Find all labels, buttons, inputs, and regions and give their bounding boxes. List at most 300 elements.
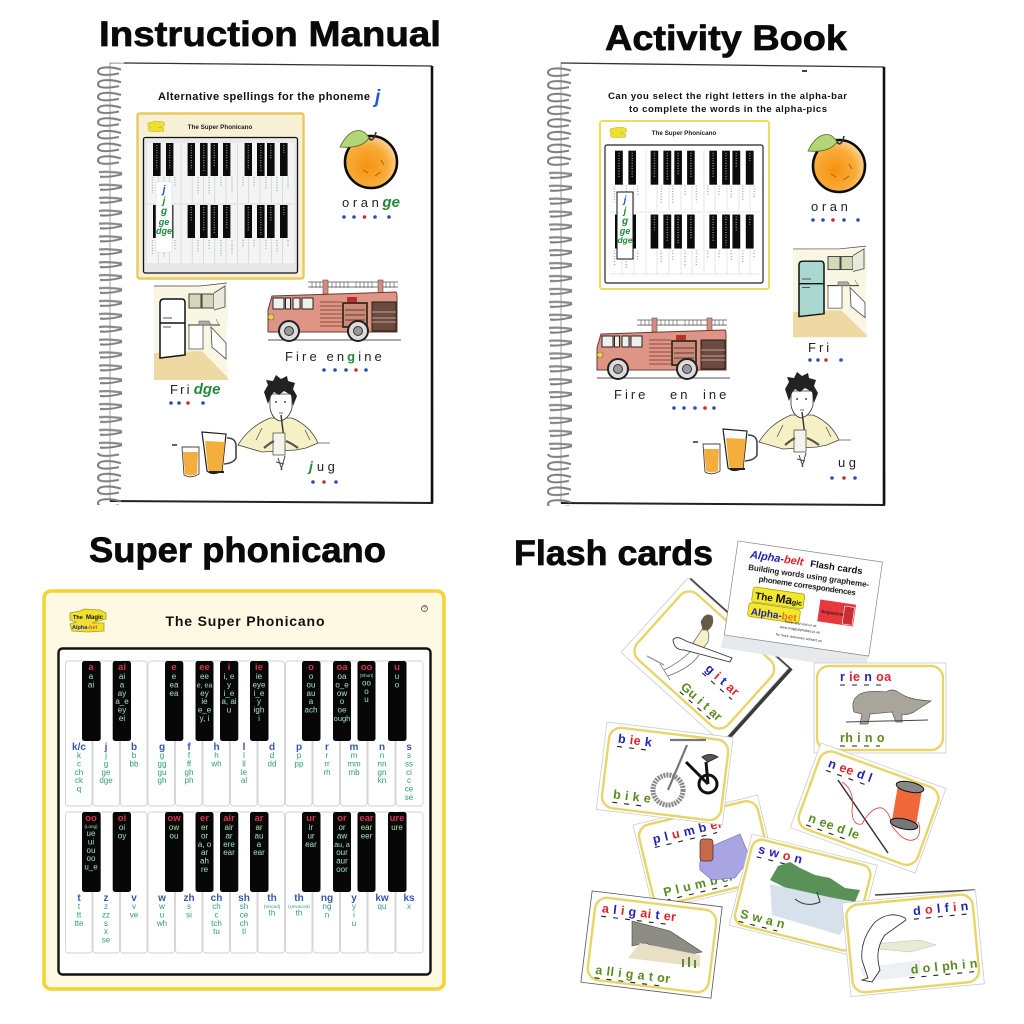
word: oran: oran bbox=[811, 199, 851, 214]
card: rhino: rh i n o bbox=[840, 731, 885, 745]
vowel spellings: upper row: igh bbox=[254, 706, 264, 715]
consonant spellings: upper row: k bbox=[77, 751, 82, 760]
vowel spellings: lower row: air bbox=[225, 823, 234, 832]
consonant spellings: upper row: c bbox=[407, 776, 411, 785]
consonant spellings: lower row: v bbox=[132, 902, 136, 911]
mini super phonicano bbox=[600, 121, 769, 289]
mini title: The Super Phonicano bbox=[188, 124, 253, 131]
consonant spellings: upper row: dd bbox=[268, 759, 276, 768]
vowel spellings: lower row: oi bbox=[119, 823, 125, 832]
consonant spellings: lower row: c bbox=[214, 910, 218, 919]
vowel spellings: upper row: ai bbox=[88, 680, 94, 689]
flash cards box bbox=[720, 541, 882, 671]
consonant spellings: upper row: n bbox=[379, 742, 385, 753]
consonant spellings: lower row: th bbox=[269, 908, 275, 918]
word: fire engine: Fire engine bbox=[285, 349, 385, 364]
vowel spellings: lower row: ar bbox=[225, 831, 233, 840]
consonant spellings: upper row: ch bbox=[75, 768, 83, 777]
icon: jug and glass bbox=[182, 432, 236, 477]
consonant spellings: upper row: ff bbox=[187, 759, 192, 768]
consonant spellings: upper row: ph bbox=[185, 776, 193, 785]
vowel spellings: lower row: ure bbox=[390, 813, 404, 824]
vowel spellings: lower row: ui bbox=[88, 837, 94, 846]
instruction text: Can you select the right letters in the alpha-bar bbox=[608, 91, 847, 102]
consonant spellings: lower row: si bbox=[186, 910, 192, 919]
j spellings popup: ge bbox=[158, 217, 169, 227]
icon: kitchen with fridge bbox=[154, 283, 228, 380]
sound dots: fridge bbox=[169, 401, 205, 405]
card: swan bbox=[729, 834, 877, 956]
vowel spellings: upper row bbox=[88, 662, 400, 723]
consonant spellings: upper row: al bbox=[241, 776, 247, 785]
vowel spellings: lower row: a, o bbox=[198, 840, 212, 849]
vowel spellings: upper row: ou bbox=[307, 680, 315, 689]
vowel spellings: lower row: ear bbox=[359, 813, 374, 824]
black keyboard border bbox=[58, 648, 430, 974]
card: swan: s w o n bbox=[757, 842, 804, 867]
card: guitar bbox=[621, 577, 793, 745]
white keys bbox=[66, 661, 423, 953]
consonant spellings: upper row: l bbox=[243, 742, 246, 753]
vowel spellings: upper row: e_e bbox=[198, 706, 212, 715]
card: needle bbox=[790, 743, 946, 873]
consonant spellings: lower row: z bbox=[104, 893, 108, 904]
mini logo bbox=[610, 127, 627, 138]
consonant spellings: lower row: zh bbox=[183, 893, 195, 904]
consonant spellings: lower row: tu bbox=[213, 927, 220, 936]
card: dolphin bbox=[842, 890, 984, 997]
spiral binding bbox=[95, 66, 125, 505]
card: needle: n ee d le bbox=[806, 811, 862, 842]
close icon: ? bbox=[423, 606, 426, 612]
vowel spellings: upper row: ea bbox=[170, 689, 179, 698]
vowel spellings: lower row: ear bbox=[361, 823, 373, 832]
consonant spellings: upper row: r bbox=[325, 742, 329, 753]
consonant spellings: upper row: wh bbox=[210, 759, 222, 768]
consonant spellings: lower row: tt bbox=[77, 910, 82, 919]
consonant spellings: lower row: ch bbox=[240, 919, 248, 928]
vowel spellings: upper row: e, ea bbox=[197, 682, 212, 689]
vowel spellings: lower row: ar bbox=[255, 813, 264, 824]
consonant spellings: upper row: gu bbox=[158, 768, 166, 777]
book page bbox=[561, 63, 885, 505]
phoneme j: j bbox=[372, 87, 381, 108]
flash cards box: phoneme correspondences bbox=[758, 574, 857, 598]
vowel spellings: lower row: a bbox=[257, 840, 262, 849]
vowel spellings: upper row: i_e bbox=[224, 689, 235, 698]
vowel spellings: upper row: a bbox=[309, 697, 314, 706]
sound dots: orange bbox=[811, 218, 860, 222]
consonant spellings: lower row: sh bbox=[238, 893, 250, 904]
consonant spellings: lower row: ks bbox=[403, 893, 415, 904]
vowel spellings: lower row: ear bbox=[253, 848, 265, 857]
icon: orange bbox=[340, 131, 397, 188]
j spellings box: g bbox=[621, 216, 628, 227]
card: rhino: r ie n oa bbox=[840, 670, 892, 684]
vowel spellings: upper row: a bbox=[88, 662, 94, 673]
consonant spellings: lower row: u bbox=[160, 910, 164, 919]
vowel spellings: upper row: ai bbox=[119, 672, 125, 681]
icon: boy drinking juice bbox=[693, 372, 851, 467]
vowel spellings: upper row: a bbox=[89, 672, 94, 681]
contact text: Tower and visit us at: bbox=[784, 620, 817, 628]
consonant spellings: upper row: b bbox=[131, 742, 137, 753]
mini keyboard bbox=[605, 145, 763, 283]
consonant spellings: upper row: f bbox=[188, 751, 191, 760]
consonant spellings: lower row: t bbox=[77, 893, 81, 904]
consonant spellings: upper row: bb bbox=[130, 759, 139, 768]
vowel spellings: lower row: oo bbox=[85, 813, 97, 824]
consonant spellings: upper row: mb bbox=[348, 768, 360, 777]
vowel spellings: lower row: ou bbox=[87, 846, 95, 855]
vowel spellings: lower row: ou bbox=[170, 831, 178, 840]
word: fire engine with gap: ine bbox=[703, 387, 729, 402]
vowel spellings: lower row: oi bbox=[118, 813, 126, 824]
consonant spellings: lower row: ve bbox=[130, 910, 139, 919]
vowel spellings: upper row: eye bbox=[253, 680, 266, 689]
vowel spellings: upper row: o bbox=[309, 672, 314, 681]
panel: flash cards collection bbox=[581, 541, 984, 998]
consonant spellings: lower row: n bbox=[325, 910, 329, 919]
vowel spellings: lower row: ue bbox=[87, 829, 96, 838]
card: swan: S w a n bbox=[739, 907, 787, 931]
consonant spellings: upper row: p bbox=[296, 742, 302, 753]
vowel spellings: upper row: y bbox=[257, 697, 261, 706]
vowel spellings: upper row: i bbox=[258, 714, 260, 723]
j spellings box: dge bbox=[617, 235, 633, 245]
icon: jug and glass bbox=[703, 429, 757, 474]
consonant spellings: lower row: w bbox=[158, 902, 165, 911]
consonant spellings: lower row: (Voiced) bbox=[264, 904, 281, 909]
vowel spellings: upper row: o bbox=[364, 687, 369, 696]
consonant spellings: upper row: j bbox=[104, 742, 108, 753]
sound dots: jug bbox=[830, 476, 857, 480]
icon: fire engine bbox=[268, 280, 401, 341]
vowel spellings: upper row: u bbox=[395, 672, 399, 681]
panel: instruction manual spiral book bbox=[95, 63, 433, 505]
j spellings box: ge bbox=[619, 226, 630, 236]
magic alpha-bet logo bbox=[747, 586, 805, 625]
vowel spellings: upper row: a_e bbox=[115, 697, 129, 706]
box subtitle: Building words using grapheme- bbox=[748, 563, 870, 589]
consonant spellings: lower row: y bbox=[351, 893, 357, 904]
consonant spellings: upper row: le bbox=[241, 768, 248, 777]
vowel spellings: lower row: re bbox=[201, 865, 209, 874]
vowel spellings: upper row: o_e bbox=[335, 680, 349, 689]
vowel spellings: lower row: ear bbox=[223, 848, 235, 857]
card: guitar: g i t ar bbox=[703, 661, 742, 699]
vowel spellings: upper row: a, ai bbox=[221, 697, 237, 706]
vowel spellings: lower row: or bbox=[201, 831, 208, 840]
black keys bbox=[82, 661, 406, 892]
heading: Activity Book: Activity Book bbox=[605, 19, 848, 58]
icon: orange bbox=[808, 135, 865, 192]
vowel spellings: lower row: er bbox=[200, 813, 209, 824]
word: fire engine with gap: Fire bbox=[614, 387, 648, 402]
logo: Alpha-bet bbox=[72, 625, 98, 631]
consonant spellings: upper row: kn bbox=[378, 776, 386, 785]
consonant spellings: lower row: th bbox=[267, 893, 277, 904]
vowel spellings: lower row: ur bbox=[306, 813, 316, 824]
word: fire engine with gap: en bbox=[670, 387, 690, 402]
consonant spellings: upper row: s bbox=[407, 751, 411, 760]
consonant spellings: lower row: u bbox=[352, 919, 356, 928]
consonant spellings: upper row bbox=[72, 742, 414, 802]
consonant spellings: upper row: ci bbox=[406, 768, 412, 777]
consonant spellings: upper row: p bbox=[297, 751, 302, 760]
yellow frame bbox=[44, 591, 444, 989]
vowel spellings: lower row: ow bbox=[169, 823, 179, 832]
mini title: The Super Phonicano bbox=[652, 130, 717, 137]
mini keyboard bbox=[144, 138, 298, 273]
consonant spellings: upper row: d bbox=[270, 751, 274, 760]
red phoneme box bbox=[817, 600, 856, 626]
consonant spellings: lower row: x bbox=[104, 927, 108, 936]
book page bbox=[110, 63, 433, 503]
sound dots: jug bbox=[311, 480, 338, 484]
card: dolphin: d o l ph i n bbox=[910, 956, 978, 977]
vowel spellings: upper row: i, e bbox=[224, 672, 235, 681]
consonant spellings: lower row: t bbox=[78, 902, 81, 911]
word: ug: ug bbox=[838, 455, 859, 470]
mini logo bbox=[148, 121, 165, 132]
consonant spellings: lower row: w bbox=[157, 893, 166, 904]
vowel spellings: upper row: (Short) bbox=[360, 673, 374, 678]
consonant spellings: lower row: ch bbox=[211, 893, 222, 904]
consonant spellings: lower row: wh bbox=[156, 919, 167, 928]
vowel spellings: upper row: au bbox=[307, 689, 315, 698]
word: fire engine with gap bbox=[614, 387, 729, 402]
consonant spellings: upper row: ce bbox=[405, 785, 414, 794]
j spellings box: j bbox=[622, 195, 627, 206]
consonant spellings: lower row: ce bbox=[240, 910, 249, 919]
consonant spellings: upper row: c bbox=[77, 759, 81, 768]
consonant spellings: upper row: m bbox=[351, 751, 358, 760]
consonant spellings: upper row: r bbox=[326, 751, 329, 760]
vowel spellings: lower row: aw bbox=[337, 831, 347, 840]
logo: Magic bbox=[86, 615, 104, 621]
sound dots: fire engine bbox=[672, 406, 716, 410]
instruction text bbox=[608, 91, 847, 115]
heading: Super phonicano: Super phonicano bbox=[89, 531, 386, 570]
contact text bbox=[775, 619, 824, 643]
heading: Instruction Manual: Instruction Manual bbox=[99, 15, 441, 54]
vowel spellings: upper row: u bbox=[394, 662, 400, 673]
consonant spellings: upper row: b bbox=[132, 751, 137, 760]
contact text: for more resources contact us bbox=[775, 632, 822, 643]
vowel spellings: upper row: ee bbox=[200, 672, 209, 681]
consonant spellings: lower row: ng bbox=[323, 902, 331, 911]
consonant spellings: lower row: s bbox=[187, 902, 191, 911]
vowel spellings: lower row: oor bbox=[336, 865, 348, 874]
vowel spellings: lower row: ur bbox=[307, 831, 315, 840]
panel: activity book spiral book bbox=[545, 63, 885, 506]
sound dots: fridge bbox=[808, 358, 843, 362]
logo: The bbox=[73, 615, 83, 621]
consonant spellings: upper row: dge bbox=[99, 776, 113, 785]
consonant spellings: upper row: k/c bbox=[72, 742, 86, 753]
consonant spellings: upper row: nn bbox=[378, 759, 386, 768]
vowel spellings: upper row: i_e bbox=[254, 689, 265, 698]
vowel spellings: upper row: oo bbox=[362, 678, 371, 687]
vowel spellings: upper row: ie bbox=[255, 662, 263, 673]
card: guitar: Gu i t ar bbox=[678, 680, 725, 724]
consonant spellings: lower row: zz bbox=[102, 910, 110, 919]
card: bike bbox=[596, 722, 733, 825]
consonant spellings: lower row: s bbox=[104, 919, 108, 928]
magic alpha-bet logo: Alpha-bet bbox=[750, 607, 798, 624]
contact text: www.magicalphabet.co.uk bbox=[780, 625, 820, 635]
vowel spellings: upper row: ey bbox=[200, 689, 209, 698]
consonant spellings: upper row: rr bbox=[324, 759, 330, 768]
consonant spellings: upper row: rh bbox=[323, 768, 331, 777]
consonant spellings: upper row: pp bbox=[295, 759, 304, 768]
consonant spellings: upper row: m bbox=[350, 742, 359, 753]
vowel spellings: lower row: ah bbox=[200, 857, 209, 866]
vowel spellings: upper row: ai bbox=[118, 662, 126, 673]
j spellings box bbox=[617, 192, 633, 259]
vowel spellings: lower row: eer bbox=[361, 831, 373, 840]
panel: super phonicano keyboard bbox=[44, 591, 444, 989]
vowel spellings: upper row: o bbox=[340, 697, 345, 706]
card: rhino bbox=[814, 663, 946, 753]
spiral binding bbox=[545, 67, 575, 506]
consonant spellings: lower row: x bbox=[407, 902, 411, 911]
consonant spellings: upper row: gh bbox=[158, 776, 166, 785]
word: orange: orange bbox=[342, 194, 400, 211]
vowel spellings: lower row: au bbox=[255, 831, 263, 840]
vowel spellings: upper row: ach bbox=[305, 706, 317, 715]
card: bike: b i k e bbox=[612, 787, 652, 806]
consonant spellings: lower row: ch bbox=[212, 902, 221, 911]
vowel spellings: lower row bbox=[84, 813, 404, 874]
j spellings popup: j bbox=[161, 196, 166, 207]
sound dots: fire engine bbox=[322, 368, 368, 372]
consonant spellings: upper row: gh bbox=[185, 768, 193, 777]
consonant spellings: lower row bbox=[75, 893, 415, 945]
vowel spellings: lower row: au, a bbox=[334, 842, 350, 849]
card: alligator bbox=[581, 891, 722, 998]
vowel spellings: upper row: ey bbox=[118, 706, 126, 715]
vowel spellings: upper row: ie bbox=[201, 697, 208, 706]
vowel spellings: lower row: or bbox=[337, 813, 347, 824]
j spellings popup bbox=[156, 182, 172, 252]
consonant spellings: upper row: g bbox=[104, 759, 108, 768]
consonant spellings: upper row: mm bbox=[347, 759, 361, 768]
vowel spellings: lower row: ar bbox=[255, 823, 263, 832]
mini super phonicano bbox=[138, 114, 304, 278]
word: fridge: Fridge bbox=[170, 381, 220, 398]
card: alligator: a l i g ai t er bbox=[601, 901, 677, 924]
card: bike: b ie k bbox=[617, 732, 653, 750]
vowel spellings: upper row: i bbox=[228, 662, 230, 673]
consonant spellings: upper row: h bbox=[213, 742, 220, 753]
consonant spellings: lower row: tch bbox=[211, 919, 222, 928]
vowel spellings: upper row: o bbox=[395, 680, 400, 689]
consonant spellings: lower row: se bbox=[102, 936, 111, 945]
card: dolphin: d o l f i n bbox=[912, 899, 969, 918]
vowel spellings: upper row: oa bbox=[336, 662, 348, 673]
consonant spellings: lower row: v bbox=[131, 893, 137, 904]
title: The Super Phonicano bbox=[166, 613, 324, 629]
consonant spellings: upper row: h bbox=[214, 751, 219, 760]
vowel spellings: upper row: oo bbox=[361, 662, 372, 673]
vowel spellings: lower row: ow bbox=[167, 813, 181, 824]
vowel spellings: lower row: ure bbox=[391, 823, 403, 832]
card: needle: n ee d l bbox=[826, 756, 875, 785]
vowel spellings: lower row: u_e bbox=[84, 863, 98, 872]
consonant spellings: lower row: th bbox=[296, 908, 302, 918]
consonant spellings: upper row: n bbox=[380, 751, 384, 760]
j spellings popup: dge bbox=[156, 226, 172, 236]
vowel spellings: lower row: air bbox=[223, 813, 235, 824]
box title: Alpha-belt Flash cards bbox=[748, 549, 863, 577]
vowel spellings: lower row: ir bbox=[309, 823, 314, 832]
vowel spellings: lower row: oy bbox=[118, 831, 126, 840]
vowel spellings: lower row: or bbox=[338, 823, 346, 832]
consonant spellings: upper row: se bbox=[405, 793, 414, 802]
vowel spellings: upper row: ei bbox=[119, 714, 125, 723]
consonant spellings: upper row: gg bbox=[158, 759, 166, 768]
consonant spellings: lower row: (Unvoiced) bbox=[288, 904, 310, 909]
icon: kitchen with teal fridge bbox=[793, 246, 867, 337]
instruction text: to complete the words in the alpha-pics bbox=[629, 104, 827, 115]
vowel spellings: upper row: e bbox=[172, 672, 177, 681]
consonant spellings: upper row: ge bbox=[102, 768, 111, 777]
consonant spellings: upper row: ck bbox=[75, 776, 84, 785]
consonant spellings: lower row: kw bbox=[375, 893, 389, 904]
consonant spellings: lower row: th bbox=[294, 893, 304, 904]
vowel spellings: upper row: o bbox=[308, 662, 314, 673]
card: plumber: p l u m b er bbox=[651, 816, 724, 847]
vowel spellings: lower row: er bbox=[201, 823, 208, 832]
close icon bbox=[422, 606, 428, 612]
vowel spellings: upper row: ough bbox=[334, 714, 350, 723]
word: fri: Fri bbox=[808, 340, 832, 355]
consonant spellings: lower row: ng bbox=[321, 893, 333, 904]
magic alpha-bet logo: The Magic bbox=[754, 588, 803, 609]
j spellings popup: g bbox=[160, 206, 167, 217]
vowel spellings: upper row: e bbox=[171, 662, 177, 673]
vowel spellings: upper row: ow bbox=[337, 689, 347, 698]
word: jug: j ug bbox=[307, 458, 338, 474]
vowel spellings: upper row: oe bbox=[338, 706, 347, 715]
vowel spellings: upper row: y, i bbox=[200, 714, 210, 723]
vowel spellings: lower row: ear bbox=[305, 840, 317, 849]
j spellings box: j bbox=[622, 206, 627, 217]
card: alligator: a ll i g a t or bbox=[595, 963, 671, 986]
vowel spellings: lower row: aur bbox=[336, 857, 348, 866]
vowel spellings: upper row: ie bbox=[256, 672, 263, 681]
vowel spellings: lower row: oo bbox=[87, 854, 96, 863]
vowel spellings: upper row: a bbox=[120, 680, 125, 689]
consonant spellings: lower row: z bbox=[104, 902, 108, 911]
vowel spellings: lower row: ar bbox=[201, 848, 208, 857]
instruction text: Alternative spellings for the phoneme bbox=[158, 91, 370, 103]
vowel spellings: upper row: u bbox=[364, 695, 369, 704]
consonant spellings: upper row: ll bbox=[242, 759, 246, 768]
card: plumber: P l u m b er bbox=[662, 869, 735, 900]
consonant spellings: lower row: i bbox=[353, 910, 355, 919]
sound dots: orange bbox=[342, 215, 391, 219]
consonant spellings: upper row: f bbox=[187, 742, 191, 753]
consonant spellings: upper row: ss bbox=[405, 759, 413, 768]
vowel spellings: lower row: (Long) bbox=[84, 824, 98, 829]
vowel spellings: upper row: ay bbox=[118, 689, 126, 698]
logo bbox=[70, 609, 106, 632]
red phoneme box: Sequencer bbox=[821, 609, 845, 617]
consonant spellings: upper row: l bbox=[243, 751, 245, 760]
